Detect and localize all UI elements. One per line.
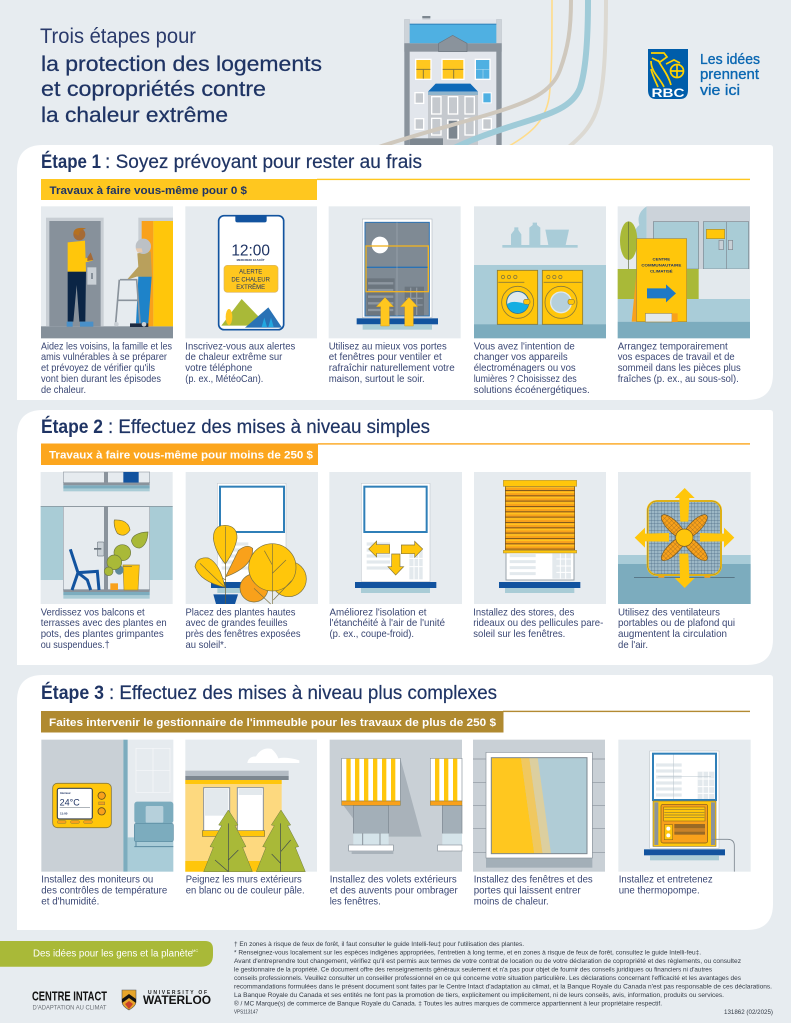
caption: Installez des stores, des (473, 607, 574, 618)
panel: step 2 (17, 410, 773, 665)
decorative curves behind the building (502, 0, 606, 150)
caption: ou suspendues.† (41, 640, 110, 651)
illustration: box fan (618, 472, 751, 604)
caption: près des fenêtres exposées (186, 629, 300, 640)
caption: Placez des plantes hautes (186, 607, 296, 618)
caption: Peignez les murs extérieurs (186, 875, 302, 886)
footnotes: VPS113147 (234, 1010, 258, 1016)
caption: et d'humidité. (41, 896, 99, 908)
logo: Centre Intact (32, 988, 107, 1012)
caption: électroménagers ou vos (474, 363, 576, 374)
footnotes: La Banque Royale du Canada et ses entités ne font pas la promotion de tiers, explicitement ou implicitement, ni de leurs conseils, avis, information, produits ou services. (234, 992, 724, 999)
caption: fraîches (p. ex., au sous-sol). (618, 374, 739, 385)
panel: step 1 (17, 145, 773, 400)
caption: au soleil*. (186, 640, 226, 651)
caption: Améliorez l'isolation et (330, 607, 427, 618)
caption (41, 875, 168, 908)
caption: Inscrivez-vous aux alertes (185, 341, 295, 352)
caption (185, 341, 295, 385)
caption: solutions écoénergétiques. (474, 385, 590, 396)
cost banner: step 1 (41, 179, 750, 200)
illustration: weatherstripping window (329, 472, 462, 604)
footnotes: 131862 (02/2025) (724, 1009, 773, 1016)
illustration: phone alert (185, 206, 317, 338)
green slogan bar: MC (192, 948, 198, 953)
caption: Installez des fenêtres et des (474, 875, 593, 886)
cost banner: step 3: Faites intervenir le gestionnaire de l'immeuble pour les travaux de plus de 250 $ (49, 717, 496, 729)
caption: rideaux ou des pellicules pare- (473, 618, 603, 629)
caption: et prévoyez de vérifier qu'ils (41, 363, 155, 374)
caption: (p. ex., MétéoCan). (185, 374, 263, 385)
logo: Centre Intact: D'ADAPTATION AU CLIMAT (32, 1004, 107, 1012)
logo: Centre Intact: CENTRE INTACT (32, 988, 107, 1004)
caption: vont bien durant les épisodes (41, 374, 161, 385)
illustration: thermostat: Intérieur (60, 791, 71, 795)
logo: RBC: prennent (700, 66, 760, 83)
illustration: window blinds (474, 472, 606, 604)
green slogan bar: Des idées pour les gens et la planète (33, 948, 193, 960)
caption: de chaleur extrême sur (185, 352, 283, 363)
caption (618, 341, 741, 385)
caption: augmentent la circulation (618, 629, 727, 640)
caption: une thermopompe. (619, 886, 700, 897)
caption: portables ou de plafond qui (618, 618, 735, 629)
caption (329, 341, 455, 385)
caption (186, 875, 305, 897)
illustration: washer and dryer (474, 206, 606, 338)
illustration: phone alert: 12:00 (231, 243, 270, 260)
caption: rafraîchir naturellement votre (329, 363, 455, 374)
illustration: community cooling centre sign: CLIMATISÉ (650, 269, 673, 274)
caption: l'étanchéité à l'air de l'unité (330, 618, 445, 629)
illustration: phone alert: EXTRÊME (236, 283, 265, 291)
heading: step 2: Étape 2 (41, 416, 103, 438)
illustration: community cooling centre sign: CENTRE (652, 257, 671, 261)
caption: Verdissez vos balcons et (41, 607, 145, 618)
illustration: pale exterior walls (185, 740, 317, 872)
footnotes: recommandations formulées dans le présent document sont faites par le Centre Intact d'adaptation au climat, et la Banque Royale du Canada n'est pas responsable de ces déclarations. (234, 984, 772, 990)
caption (41, 607, 167, 651)
logo: University of Waterloo (122, 990, 211, 1010)
caption (619, 875, 713, 897)
title: la protection des logements (41, 53, 322, 76)
footnotes: * Renseignez-vous localement sur les espèces indigènes appropriées, l'entretien à long terme, et en zones à risque de feux de forêt, consultez le guide Intelli-feu‡. (234, 950, 701, 956)
illustration: thermostat: 11:00 (60, 811, 68, 815)
illustration: community cooling centre sign (618, 206, 750, 338)
caption: Installez des volets extérieurs (330, 875, 457, 886)
caption: portes qui laissent entrer (474, 886, 581, 897)
decorative curves in front of the building (370, 0, 588, 150)
caption: vos espaces de travail et de (618, 352, 735, 363)
illustration: heat pump (618, 740, 751, 872)
panel: step 3 (17, 675, 773, 930)
heading: step 1: Étape 1 (41, 151, 101, 173)
footnotes: † En zones à risque de feux de forêt, il faut consulter le guide Intelli-feu‡ pour l'utilisation des plantes. (234, 941, 524, 948)
illustration: apartment building (404, 16, 502, 146)
caption: lumières ? Choisissez des (474, 374, 577, 385)
caption: les fenêtres. (330, 896, 381, 908)
illustration: thermostat (41, 740, 173, 872)
caption: Vous avez l'intention de (474, 341, 575, 352)
illustration: phone alert: ALERTE (239, 270, 262, 276)
caption: de chaleur. (41, 385, 86, 396)
caption: des contrôles de température (41, 886, 168, 897)
footnotes: ® / MC Marque(s) de commerce de Banque Royale du Canada. ‡ Toutes les autres marques de commerce appartiennent à leur propriétaire respectif. (234, 1000, 662, 1008)
caption (618, 607, 735, 651)
caption: maison, surtout le soir. (329, 374, 425, 385)
caption: Utilisez des ventilateurs (618, 607, 720, 618)
footnotes: Avant d'entreprendre tout changement, vérifiez qu'il est permis aux termes de votre contrat de location ou de votre déclaration de copropriété et des règlements, ou consultez (234, 958, 742, 965)
footnotes (234, 941, 773, 1016)
heading: step 2: : Effectuez des mises à niveau simples (108, 417, 430, 438)
illustration: awnings (330, 740, 462, 872)
illustration: phone alert: DE CHALEUR (231, 277, 271, 283)
footnotes: le gestionnaire de la propriété. Ce document offre des renseignements généraux seulement et n'a pas pour objet de fournir des conseils juridiques ou financiers ni d'autres (234, 966, 713, 974)
logo: University of Waterloo: UNIVERSITY OF (148, 990, 207, 996)
caption: en blanc ou de couleur pâle. (186, 886, 305, 897)
cost banner: step 1: Travaux à faire vous-même pour 0 $ (50, 185, 247, 197)
caption: (p. ex., coupe-froid). (330, 629, 414, 640)
illustration: tall plants by window (186, 472, 318, 604)
illustration: balcony plants (41, 472, 173, 604)
green slogan bar (0, 941, 213, 967)
caption (330, 607, 445, 640)
caption (474, 341, 590, 396)
caption: et des auvents pour ombrager (330, 886, 458, 897)
caption: pots, des plantes grimpantes (41, 629, 164, 640)
illustration: thermostat: 24°C (60, 798, 80, 808)
heading: step 1: : Soyez prévoyant pour rester au frais (105, 152, 422, 173)
caption: moins de chaleur. (474, 896, 549, 908)
caption: de l'air. (618, 640, 648, 651)
caption: Arrangez temporairement (618, 341, 728, 352)
caption: votre téléphone (185, 363, 253, 374)
illustration: community cooling centre sign: COMMUNAUTAIRE (641, 263, 682, 267)
logo: RBC: vie ici (700, 82, 740, 99)
caption: soleil sur les fenêtres. (473, 629, 565, 640)
heading: step 3: : Effectuez des mises à niveau plus complexes (109, 683, 497, 704)
footnotes: conseils professionnels. Veuillez consulter un conseiller professionnel en ce qui concerne votre situation particulière. Les déclarations concernant l'efficacité et les avantages des (234, 975, 742, 982)
caption (473, 607, 603, 640)
cost banner: step 3 (41, 711, 750, 732)
caption: avec de grandes feuilles (186, 618, 288, 629)
caption (330, 875, 458, 908)
caption: Installez des moniteurs ou (41, 875, 153, 886)
caption: Aidez les voisins, la famille et les (41, 341, 172, 352)
illustration: helping neighbours (41, 206, 173, 338)
caption (186, 607, 300, 651)
caption: sommeil dans les pièces plus (618, 363, 741, 374)
logo: University of Waterloo: WATERLOO (143, 995, 211, 1007)
title: Trois étapes pour (40, 25, 196, 48)
caption: Installez et entretenez (619, 875, 713, 886)
caption: et fenêtres pour ventiler et (329, 352, 442, 363)
caption: Utilisez au mieux vos portes (329, 341, 447, 352)
logo: RBC: RBC (652, 88, 684, 100)
title: et copropriétés contre (41, 78, 266, 101)
title (40, 25, 322, 127)
logo: RBC (648, 49, 760, 100)
logo: RBC: Les idées (700, 51, 760, 68)
illustration: heat-blocking window (473, 740, 605, 872)
caption (474, 875, 593, 908)
caption: terrasses avec des plantes en (41, 618, 167, 629)
heading: step 3: Étape 3 (41, 682, 104, 704)
title: la chaleur extrême (41, 104, 228, 127)
caption (41, 341, 172, 396)
illustration: phone alert: MERCREDI 13 AOÛT (237, 259, 265, 262)
caption: changer vos appareils (474, 352, 568, 363)
cost banner: step 2 (41, 443, 750, 465)
cost banner: step 2: Travaux à faire vous-même pour moins de 250 $ (49, 450, 313, 462)
caption: amis vulnérables à se préparer (41, 352, 168, 363)
illustration: open window at night (329, 206, 461, 338)
